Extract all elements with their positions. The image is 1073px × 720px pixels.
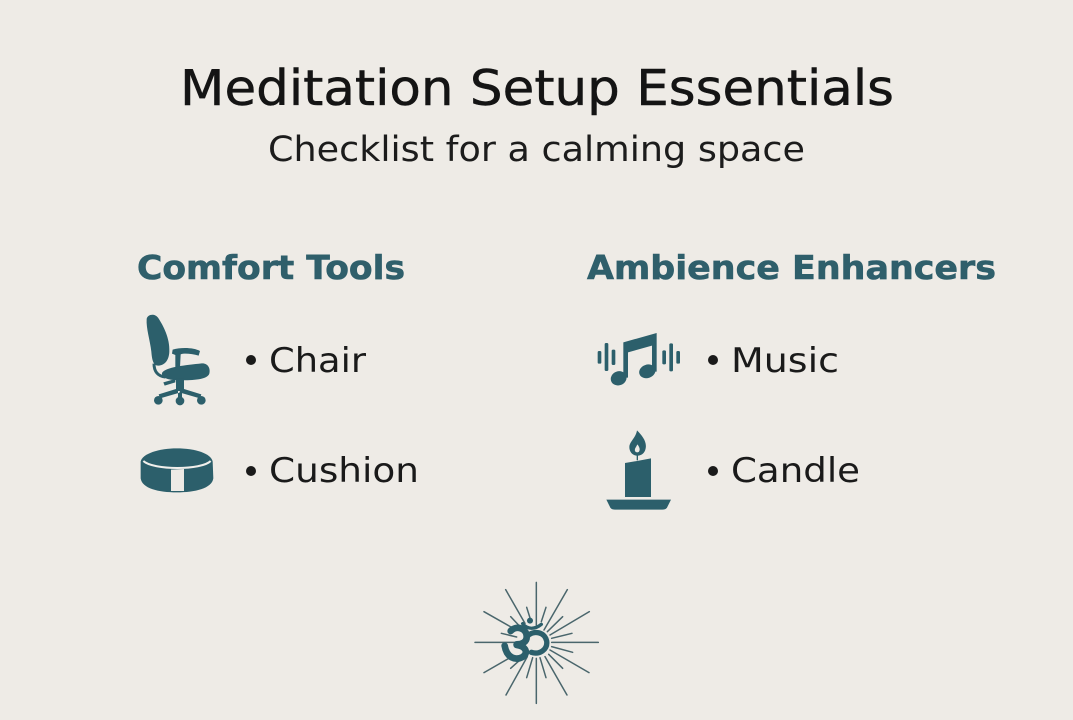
subtitle: Checklist for a calming space bbox=[268, 130, 805, 170]
item: cushion: Cushion bbox=[269, 451, 419, 491]
heading: comfort tools: Comfort Tools bbox=[137, 248, 405, 287]
om dot bbox=[527, 618, 533, 624]
icon: cushion bbox=[141, 448, 213, 492]
sun rays bbox=[475, 582, 598, 703]
item: music: Music bbox=[731, 341, 839, 381]
icon: om with sun rays bbox=[475, 582, 598, 703]
om symbol bbox=[505, 624, 547, 659]
heading: ambience enhancers: Ambience Enhancers bbox=[587, 248, 996, 287]
panel: ambience enhancers bbox=[587, 248, 996, 510]
icon: chair bbox=[147, 315, 210, 405]
item: candle: Candle bbox=[731, 451, 860, 491]
icon: candle bbox=[606, 430, 671, 510]
icon: music bbox=[598, 333, 680, 388]
title: Meditation Setup Essentials bbox=[180, 60, 894, 117]
panel: comfort tools bbox=[137, 248, 419, 492]
item: chair: Chair bbox=[269, 341, 366, 381]
